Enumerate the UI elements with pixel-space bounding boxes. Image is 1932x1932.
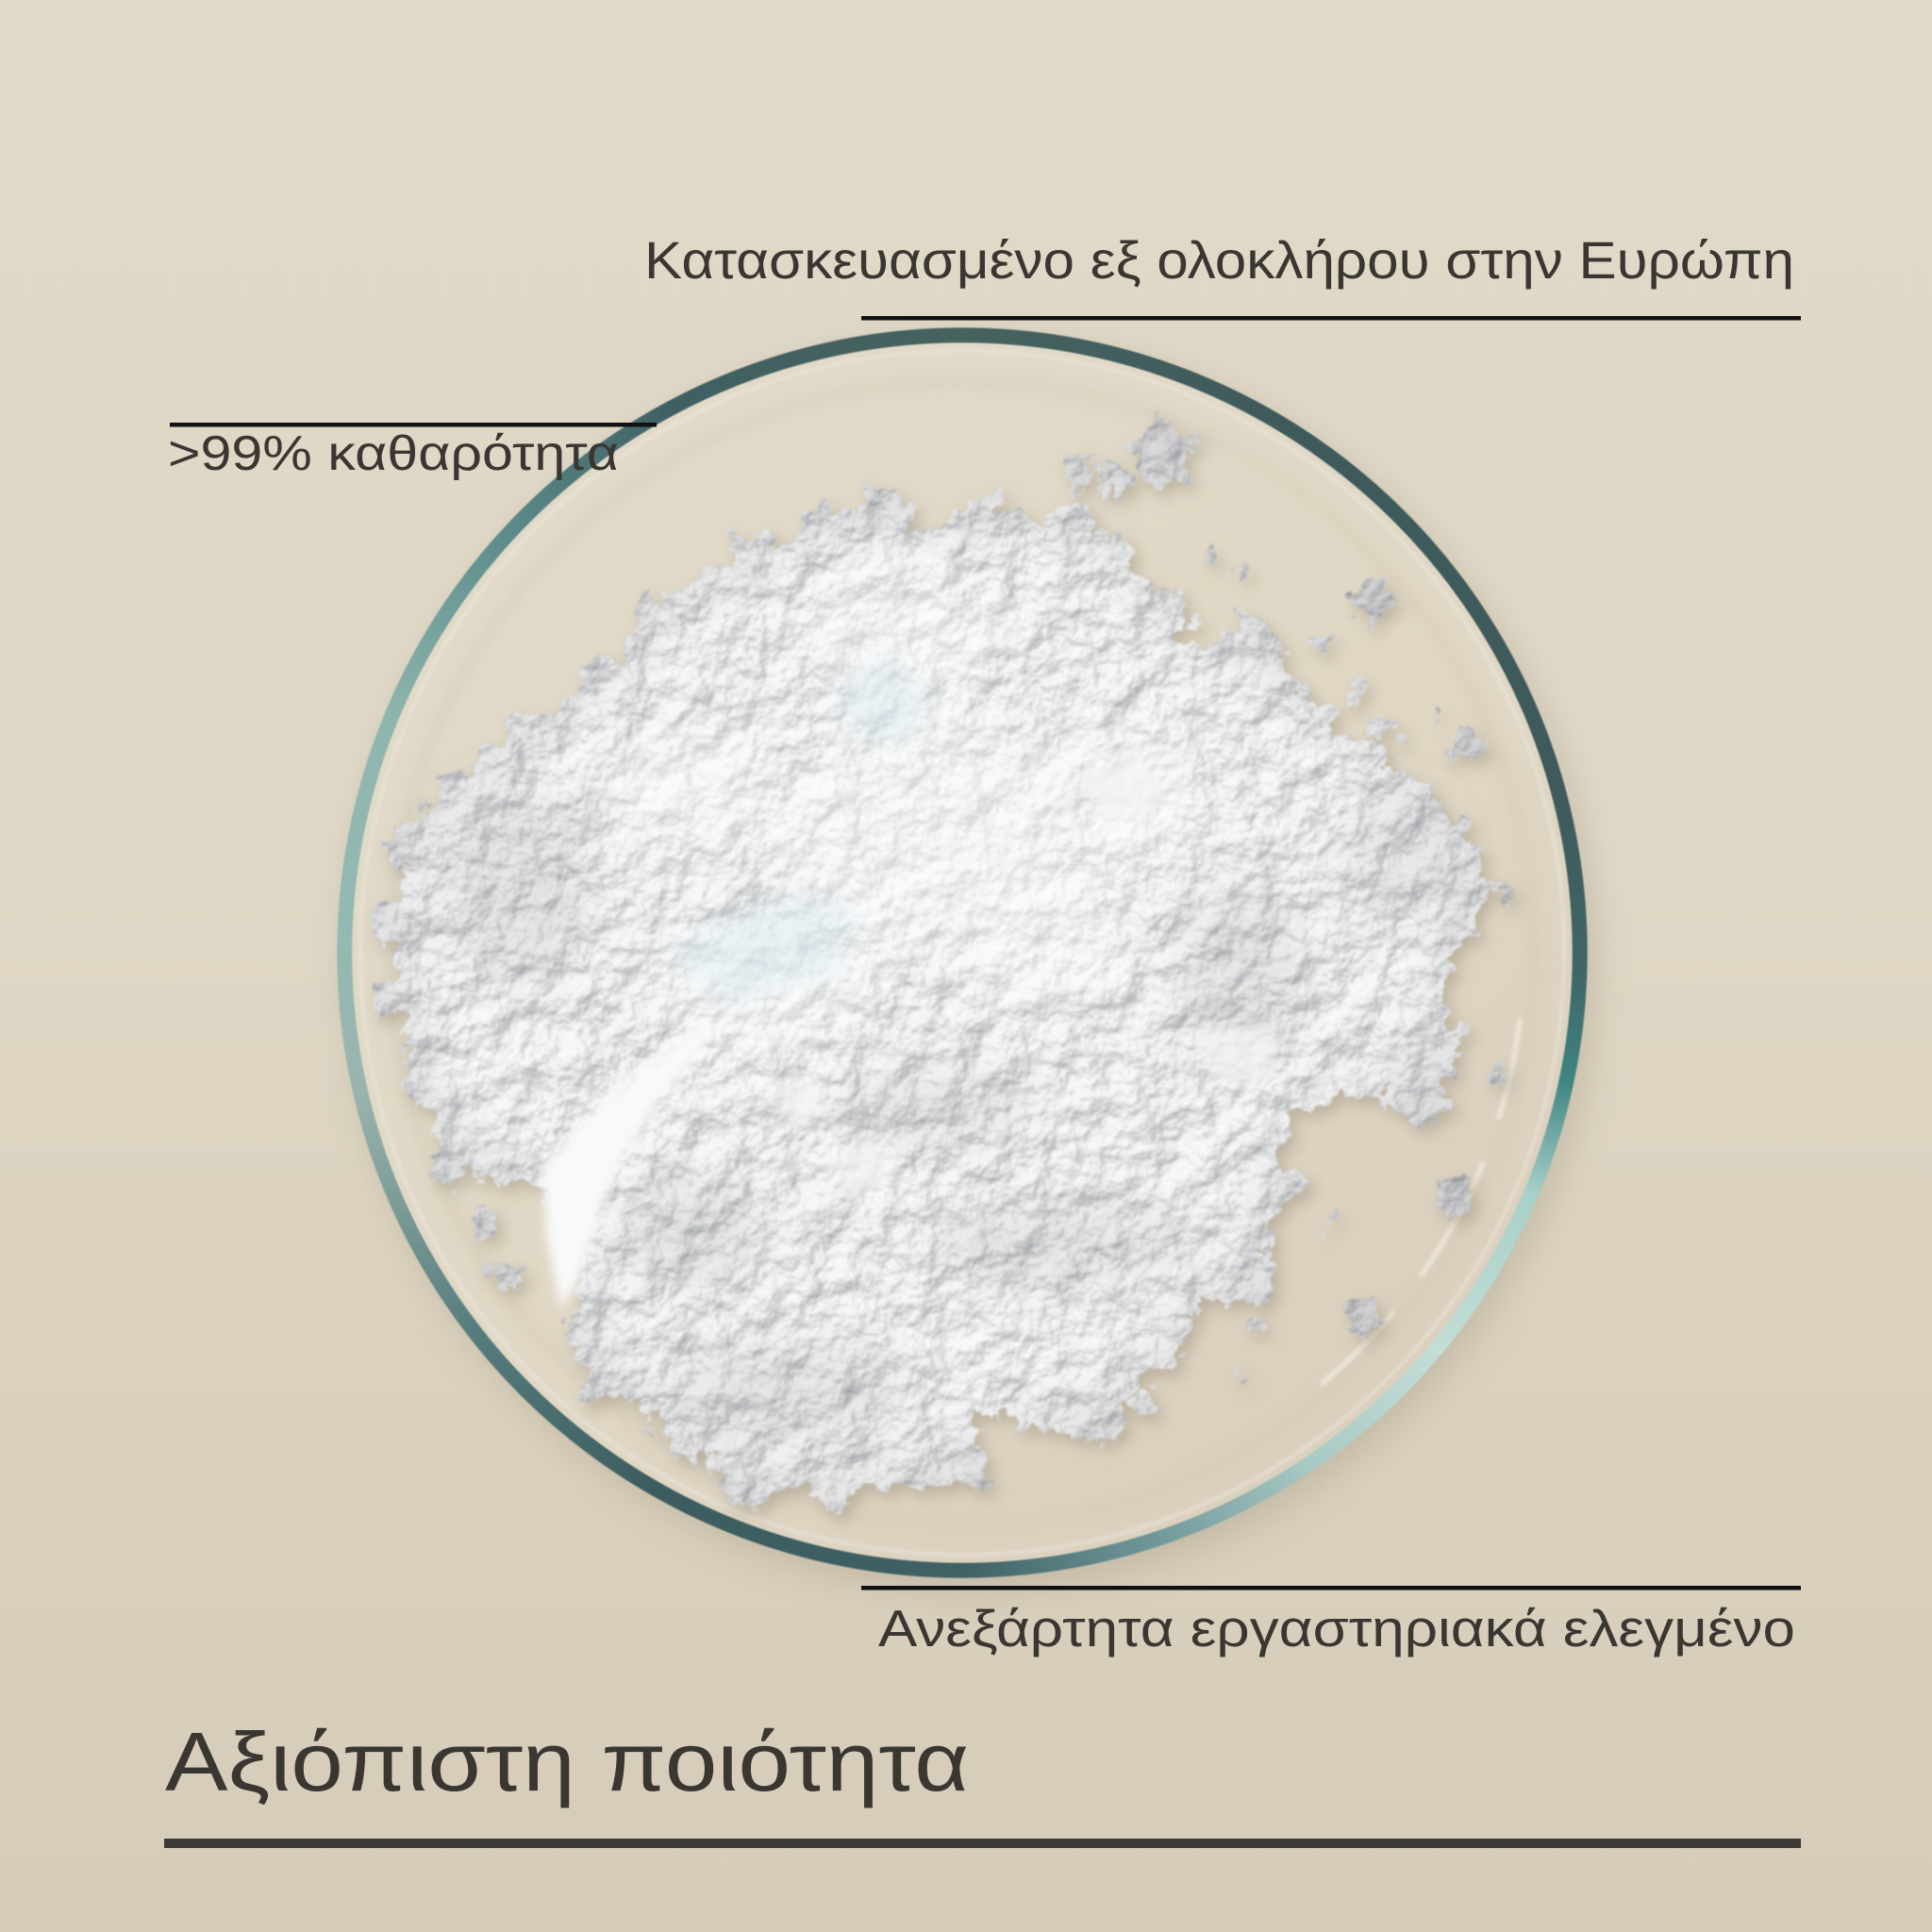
powder body and stray grains: [372, 423, 1519, 1509]
dish glass rim: [335, 325, 1590, 1580]
callout: made in Europe: [644, 230, 1801, 321]
title: Αξιόπιστη ποιότητα: [165, 1715, 969, 1808]
title rule: [164, 1839, 1801, 1848]
flat powder flakes: [776, 752, 1275, 1201]
grey shaded hollows: [443, 789, 1441, 1441]
callout: purity: >99% καθαρότητα: [168, 426, 619, 481]
callout: lab tested: Ανεξάρτητα εργαστηριακά ελεγμένο: [878, 1599, 1795, 1657]
dish shadow: [347, 340, 1596, 1589]
pale blue tint patches: [665, 653, 930, 1004]
dish well: [349, 340, 1575, 1566]
smooth scooped powder face: [542, 1020, 727, 1308]
callout: made in Europe: Κατασκευασμένο εξ ολοκλήρου στην Ευρώπη: [644, 230, 1794, 290]
bright powder highlights: [604, 579, 1208, 1041]
inner base highlight: [1323, 1021, 1520, 1383]
